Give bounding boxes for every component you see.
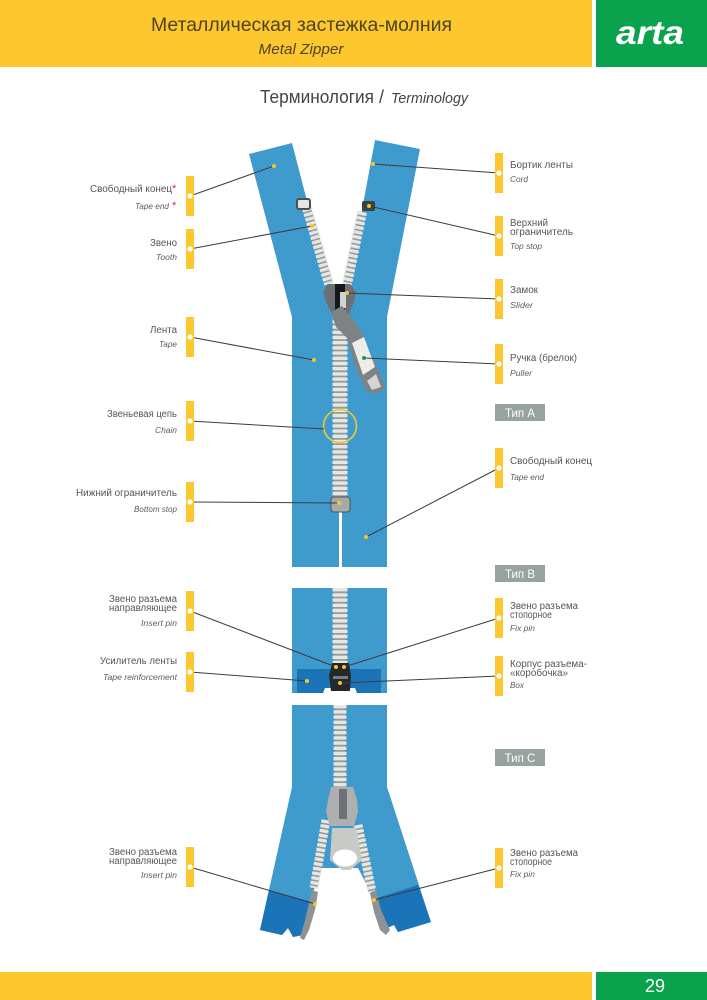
label: insert pin (type B): Звено разъема [109, 594, 177, 605]
white V gap between tapes [292, 140, 375, 300]
label: tooth [150, 229, 194, 269]
label: tape end (left): Свободный конец [90, 183, 172, 195]
teeth [314, 705, 372, 892]
reinforced tape ends [260, 890, 312, 937]
logo panel: arta: arta [616, 14, 684, 51]
label: box: Корпус разъема- [510, 659, 587, 670]
tape [260, 705, 431, 937]
label: tape end (right) [495, 448, 592, 488]
label: insert pin (type B): Insert pin [141, 618, 177, 628]
header band: yellow title panel [0, 0, 592, 67]
label: fix pin (type C): Звено разъема [510, 848, 578, 859]
label: fix pin (type B): Fix pin [510, 623, 535, 633]
label: chain [107, 401, 194, 441]
label: tape: Лента [150, 325, 177, 336]
label: tape [150, 317, 194, 357]
chain highlight ring [324, 410, 356, 442]
section heading: Terminology: Terminology [391, 91, 469, 107]
slider ring hole [333, 850, 357, 866]
label: tape end (left): * [172, 200, 177, 212]
label: tape: Tape [159, 339, 177, 349]
box [329, 663, 351, 691]
teeth chain [334, 588, 346, 664]
label: slider: Замок [510, 285, 539, 296]
fix pin [370, 890, 390, 935]
label: tape reinforcement: Tape reinforcement [103, 672, 178, 682]
label: bottom stop [76, 482, 194, 522]
label: cord: Cord [510, 174, 528, 184]
page number panel [596, 972, 707, 1000]
tag: type B: Тип В [505, 569, 535, 581]
tape, open top [249, 140, 420, 567]
tag: type A [495, 404, 545, 421]
label: fix pin (type C): стопорное [510, 857, 552, 868]
label: tape end (left): * [172, 183, 177, 195]
title: Russian: Металлическая застежка-молния [151, 15, 452, 36]
label: top stop: ограничитель [510, 227, 573, 238]
label: fix pin (type C) [495, 848, 578, 888]
footer band [0, 972, 592, 1000]
label: tooth: Tooth [156, 252, 177, 262]
label: cord [495, 153, 573, 193]
label: insert pin (type B): направляющее [109, 603, 177, 614]
tag: type B [495, 565, 545, 582]
label: box: Box [510, 680, 525, 690]
slider [323, 284, 356, 322]
leader lines [190, 164, 499, 904]
label: tooth: Звено [150, 238, 177, 249]
slider [326, 787, 358, 826]
label: bottom stop: Bottom stop [134, 504, 177, 514]
label: bottom stop: Нижний ограничитель [76, 488, 177, 499]
label: puller [495, 344, 577, 384]
label: slider [495, 279, 539, 319]
label: cord: Бортик ленты [510, 160, 573, 171]
label: fix pin (type C): Fix pin [510, 869, 535, 879]
label: tape reinforcement: Усилитель ленты [100, 656, 177, 667]
label: fix pin (type B): Звено разъема [510, 601, 578, 612]
tag: type A: Тип А [505, 408, 535, 420]
label: puller: Ручка (брелок) [510, 352, 577, 364]
zipper type B: middle section [292, 588, 387, 693]
tag: type C [495, 749, 545, 766]
label: chain: Звеньевая цепь [107, 409, 177, 420]
bottom stop [331, 497, 350, 512]
subtitle: English: Metal Zipper [258, 42, 345, 58]
label: fix pin (type B): стопорное [510, 610, 552, 621]
label: top stop: Top stop [510, 241, 542, 251]
section heading: Terminology: Терминология [260, 87, 374, 107]
label: tape end (right): Tape end [510, 472, 544, 482]
label: insert pin (type C) [109, 847, 194, 887]
label: box [495, 656, 587, 696]
section heading: Terminology [260, 87, 469, 107]
page number panel: 29 [645, 976, 665, 996]
label: tape end (right): Свободный конец [510, 455, 592, 467]
label: slider: Slider [510, 300, 534, 310]
bottom notch [323, 688, 357, 693]
insert pin [300, 890, 318, 940]
label: puller: Puller [510, 368, 533, 378]
label: chain: Chain [155, 425, 177, 435]
zipper type C: lower section [260, 705, 431, 940]
label: insert pin (type C): Звено разъема [109, 847, 177, 858]
label: insert pin (type C): Insert pin [141, 870, 177, 880]
teeth chain [307, 208, 362, 500]
label: fix pin (type B) [495, 598, 578, 638]
puller [331, 306, 385, 394]
label: tape end (left) [90, 176, 194, 216]
logo panel: arta [596, 0, 707, 67]
target dots on zipper [272, 162, 376, 906]
label: tape end (left): Tape end [135, 201, 169, 211]
label: tape reinforcement [100, 652, 194, 692]
zipper type A: upper section [249, 140, 420, 567]
tag: type C: Тип С [505, 753, 535, 765]
tape reinforcement [297, 669, 381, 693]
label: insert pin (type C): направляющее [109, 856, 177, 867]
label: insert pin (type B) [109, 591, 194, 631]
section heading: Terminology: / [379, 87, 384, 107]
label: box: «коробочка» [510, 667, 568, 679]
top stops [297, 199, 310, 209]
label: top stop: Верхний [510, 218, 548, 229]
label: top stop [495, 216, 573, 256]
